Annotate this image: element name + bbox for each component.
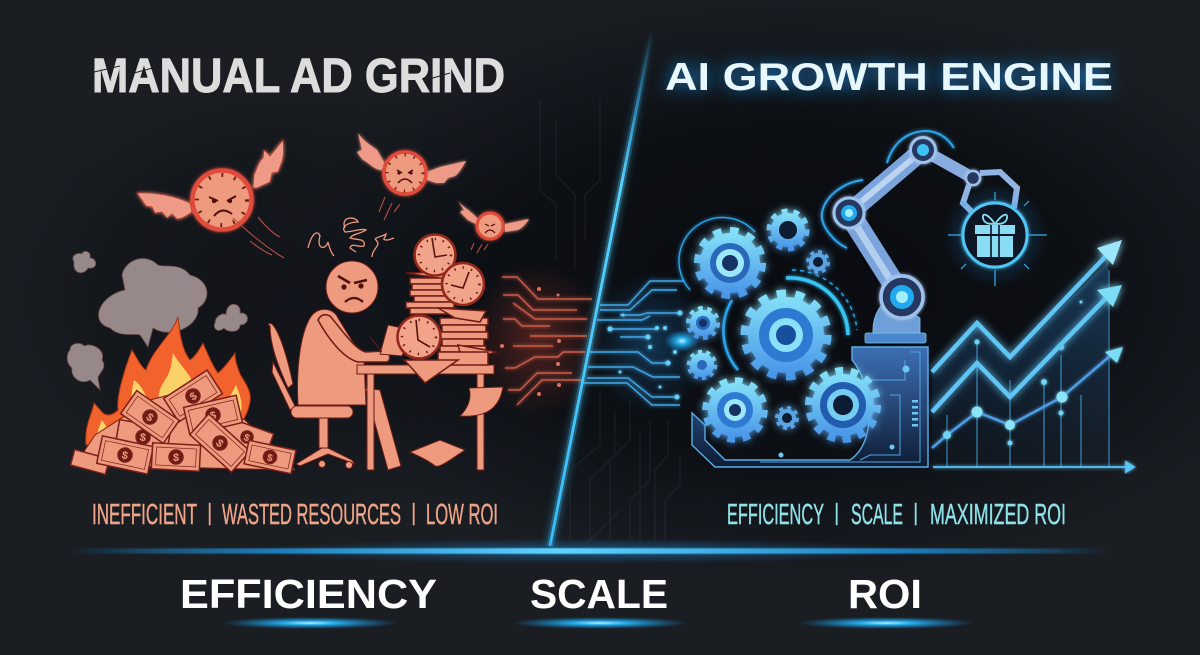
- fire: [86, 317, 250, 445]
- robot arm: [822, 131, 1017, 343]
- faint background circuit traces: [540, 100, 680, 545]
- flying clock: medium: [357, 133, 466, 194]
- office chair: [268, 323, 355, 468]
- money pile: [71, 370, 296, 474]
- gears: [688, 212, 877, 439]
- clocks on paper pile: [398, 234, 484, 358]
- stress scribbles: [308, 218, 394, 257]
- falling papers: [410, 387, 503, 466]
- growth chart: [932, 240, 1134, 472]
- chart nodes: [974, 300, 1082, 446]
- right caption: [727, 499, 1066, 531]
- head: [326, 261, 378, 313]
- right caption: SCALE: [851, 499, 903, 531]
- chart axis: [933, 462, 1134, 472]
- smoke clouds: [67, 251, 248, 390]
- pedestal: [865, 300, 926, 343]
- gear ring arcs: [679, 217, 857, 370]
- metric: roi: ROI: [848, 571, 922, 617]
- icon: gift: [943, 183, 1047, 287]
- metric: roi: [798, 571, 974, 629]
- bill stack: $: [266, 453, 274, 465]
- flying clock: large: [137, 140, 284, 230]
- title: manual ad grind: MANUAL AD GRIND: [92, 50, 505, 103]
- stressed worker at desk: [268, 218, 503, 470]
- right circuit traces: blue: [583, 270, 710, 415]
- diagonal divider line: [550, 30, 652, 546]
- right caption: MAXIMIZED ROI: [930, 499, 1066, 531]
- bill stack: $: [209, 409, 218, 423]
- motion lines: [233, 197, 488, 258]
- claw: [963, 172, 1017, 214]
- metric: scale: SCALE: [530, 571, 668, 617]
- arrow: upper trend: [932, 240, 1122, 372]
- bill stack: $: [121, 449, 129, 462]
- desk: [357, 365, 494, 470]
- title: ai growth engine: AI GROWTH ENGINE: [665, 56, 1113, 99]
- left caption: INEFFICIENT: [92, 499, 197, 531]
- horizontal glow line: [70, 538, 1110, 564]
- metric: scale: [512, 571, 688, 629]
- bill stack: $: [188, 390, 199, 404]
- bill stack: $: [139, 432, 147, 444]
- machine base: [692, 347, 928, 467]
- torso and leg: [298, 309, 401, 470]
- left caption: [92, 499, 498, 531]
- arm cable: [822, 131, 954, 248]
- left caption: LOW ROI: [426, 499, 498, 531]
- bill stack: $: [143, 411, 155, 424]
- left circuit traces: red: [470, 262, 605, 417]
- bill stack: $: [173, 452, 179, 464]
- arrow: lower trend: [932, 347, 1123, 448]
- bill stack: $: [213, 437, 226, 450]
- chart drop lines: [947, 270, 1109, 467]
- pen and paper: [370, 325, 412, 356]
- flying clock: small: [458, 201, 529, 239]
- arm joints: [834, 138, 980, 318]
- metric: efficiency: EFFICIENCY: [180, 571, 437, 617]
- arm links: [849, 150, 973, 297]
- paper pile: [404, 272, 497, 383]
- left caption: WASTED RESOURCES: [222, 499, 401, 531]
- bill stack: [71, 370, 296, 474]
- bill stack: $: [242, 432, 251, 445]
- arrow: middle trend: [932, 285, 1122, 412]
- right caption: EFFICIENCY: [727, 499, 824, 531]
- arm: [318, 315, 390, 362]
- gear cluster with circuit board: [679, 212, 928, 467]
